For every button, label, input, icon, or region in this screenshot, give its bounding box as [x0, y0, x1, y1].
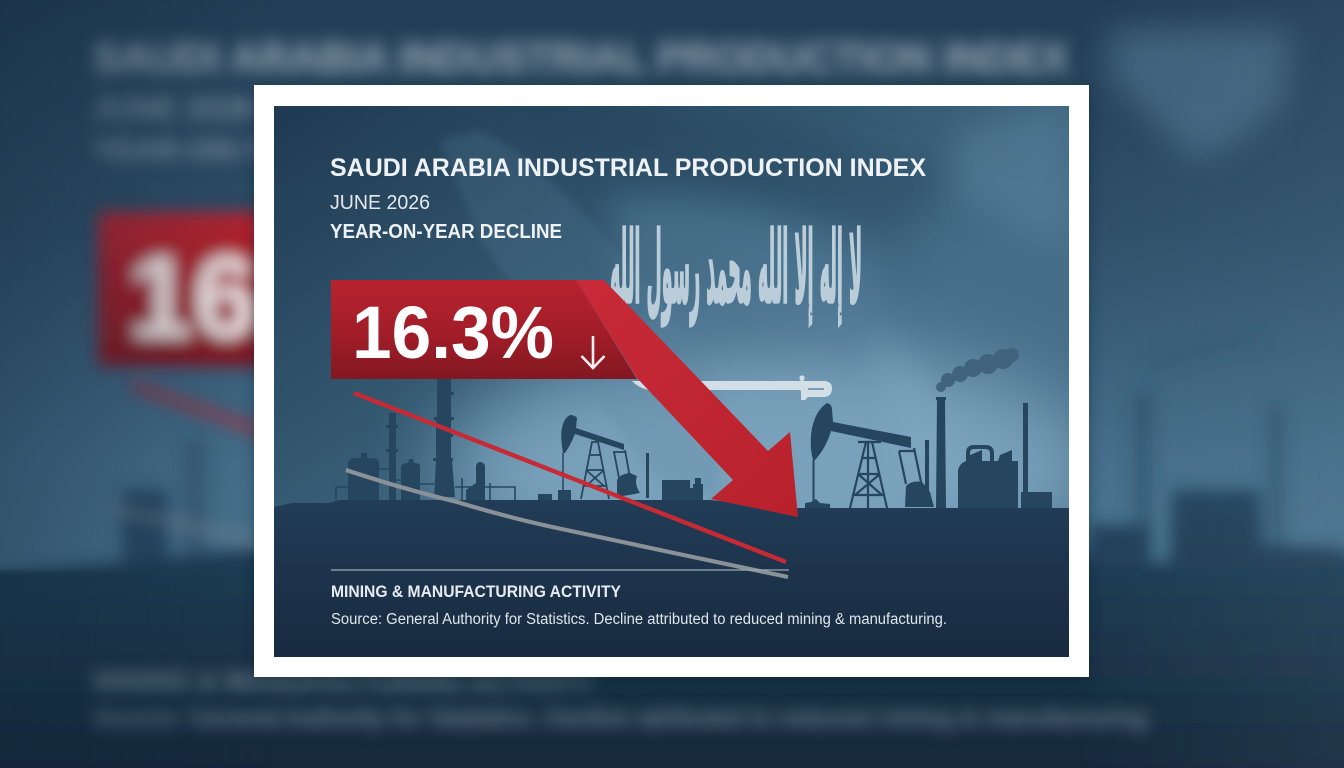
flag sword	[632, 375, 832, 400]
flag fold: centre highlight	[610, 193, 870, 324]
flag fold: top right highlight	[952, 113, 1064, 216]
blurred source line: Source: General Authority for Statistics. Decline attributed to reduced mining & manufacturing.	[93, 705, 1153, 732]
panel: infographic card	[274, 106, 1069, 657]
industrial skyline silhouette	[336, 348, 1052, 509]
big chimney	[433, 370, 455, 497]
blurred background skyline	[0, 340, 1344, 768]
blurred activity label: MINING & MANUFACTURING ACTIVITY	[93, 666, 593, 696]
blurred background copy of the card	[93, 34, 1153, 732]
thin stack	[646, 453, 649, 498]
activity label: MINING & MANUFACTURING ACTIVITY	[331, 583, 621, 601]
smokestack two	[936, 397, 946, 508]
large red down arrow	[576, 280, 798, 517]
title: SAUDI ARABIA INDUSTRIAL PRODUCTION INDEX	[330, 154, 926, 182]
ground	[274, 500, 1069, 657]
right box building	[1021, 492, 1052, 509]
thin tower	[386, 413, 398, 500]
blurred red banner	[98, 212, 398, 366]
chart: grey trend line	[346, 470, 788, 577]
tall right stack	[1023, 403, 1028, 493]
chart: red trend line	[354, 393, 786, 562]
blurred background flag fold	[1110, 30, 1290, 160]
pipe rack	[336, 469, 515, 500]
divider	[331, 569, 789, 571]
large process tank	[958, 445, 1018, 508]
headline figure: 16.3%	[352, 291, 554, 374]
left refinery tank one	[348, 453, 379, 500]
card drop shadow	[254, 88, 1089, 682]
source note: Source: General Authority for Statistics. Decline attributed to reduced mining & manufacturing.	[331, 611, 947, 628]
smoke plume	[936, 348, 1019, 392]
subtitle: YEAR-ON-YEAR DECLINE	[330, 221, 562, 243]
pump jack one	[558, 415, 640, 500]
white card frame	[254, 85, 1089, 677]
flag fold: left diagonal edge	[444, 132, 616, 286]
ground level small unit	[538, 494, 552, 500]
left refinery tank two	[401, 459, 420, 500]
flag background	[274, 106, 1069, 508]
smokestack one	[925, 440, 929, 490]
sky glow low on horizon	[408, 317, 1069, 508]
date: JUNE 2026	[330, 192, 430, 214]
blurred date: JUNE 2026	[93, 92, 257, 125]
blurred red line	[132, 385, 300, 445]
blurred figure: 16.3%	[128, 232, 458, 362]
icon: small down arrow	[582, 336, 604, 368]
squat units	[662, 480, 690, 501]
flag calligraphy: لا إله إلا الله محمد رسول الله	[610, 211, 862, 326]
small column	[476, 462, 485, 500]
red banner	[331, 280, 637, 379]
blurred grey line	[110, 508, 300, 550]
blurred subtitle: YEAR-ON-YEAR DECLINE	[93, 134, 473, 167]
pump jack two	[805, 403, 934, 508]
flag fold: top dark band	[736, 147, 934, 228]
flag fold: sweep highlight	[890, 360, 894, 361]
blurred title: SAUDI ARABIA INDUSTRIAL PRODUCTION INDEX	[93, 34, 1068, 81]
